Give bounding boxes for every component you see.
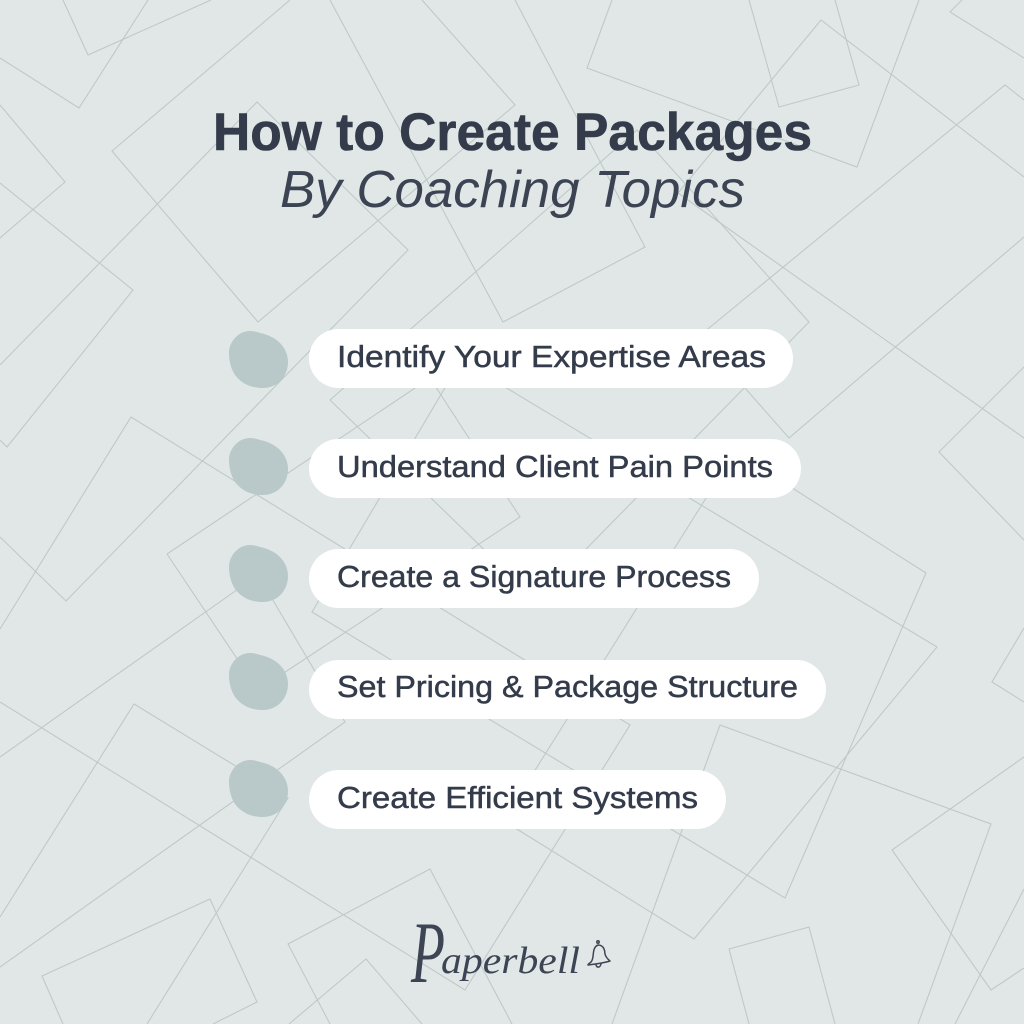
step 4: set pricing and package structure (229, 653, 826, 719)
pill 1 (309, 329, 793, 388)
pill 3 (309, 549, 759, 608)
logo wordmark: aperbell (441, 940, 580, 982)
logo initial: P (410, 905, 445, 1002)
subheading: by coaching topics: By Coaching Topics (280, 161, 745, 219)
pill 4 (309, 660, 826, 719)
pill label 3: Create a Signature Process (337, 559, 731, 594)
title (213, 103, 812, 219)
step 2: understand client pain points (229, 438, 801, 498)
pill label 5: Create Efficient Systems (337, 780, 698, 815)
step 1: identify your expertise areas (229, 329, 793, 388)
icon: bell (588, 941, 610, 967)
step 3: create a signature process (229, 545, 759, 608)
step 5: create efficient systems (229, 760, 726, 829)
heading: how to create packages: How to Create Packages (213, 103, 812, 162)
bullet blob 2 (229, 438, 288, 495)
pill label 1: Identify Your Expertise Areas (337, 339, 766, 374)
bullet blob 5 (229, 760, 288, 817)
pill 2 (309, 439, 801, 498)
logo: paperbell (410, 905, 610, 1002)
bullet blob 4 (229, 653, 288, 710)
bullet blob 3 (229, 545, 288, 602)
pill 5 (309, 770, 726, 829)
pill label 2: Understand Client Pain Points (337, 449, 773, 484)
pill label 4: Set Pricing & Package Structure (337, 669, 798, 704)
bullet blob 1 (229, 331, 288, 388)
